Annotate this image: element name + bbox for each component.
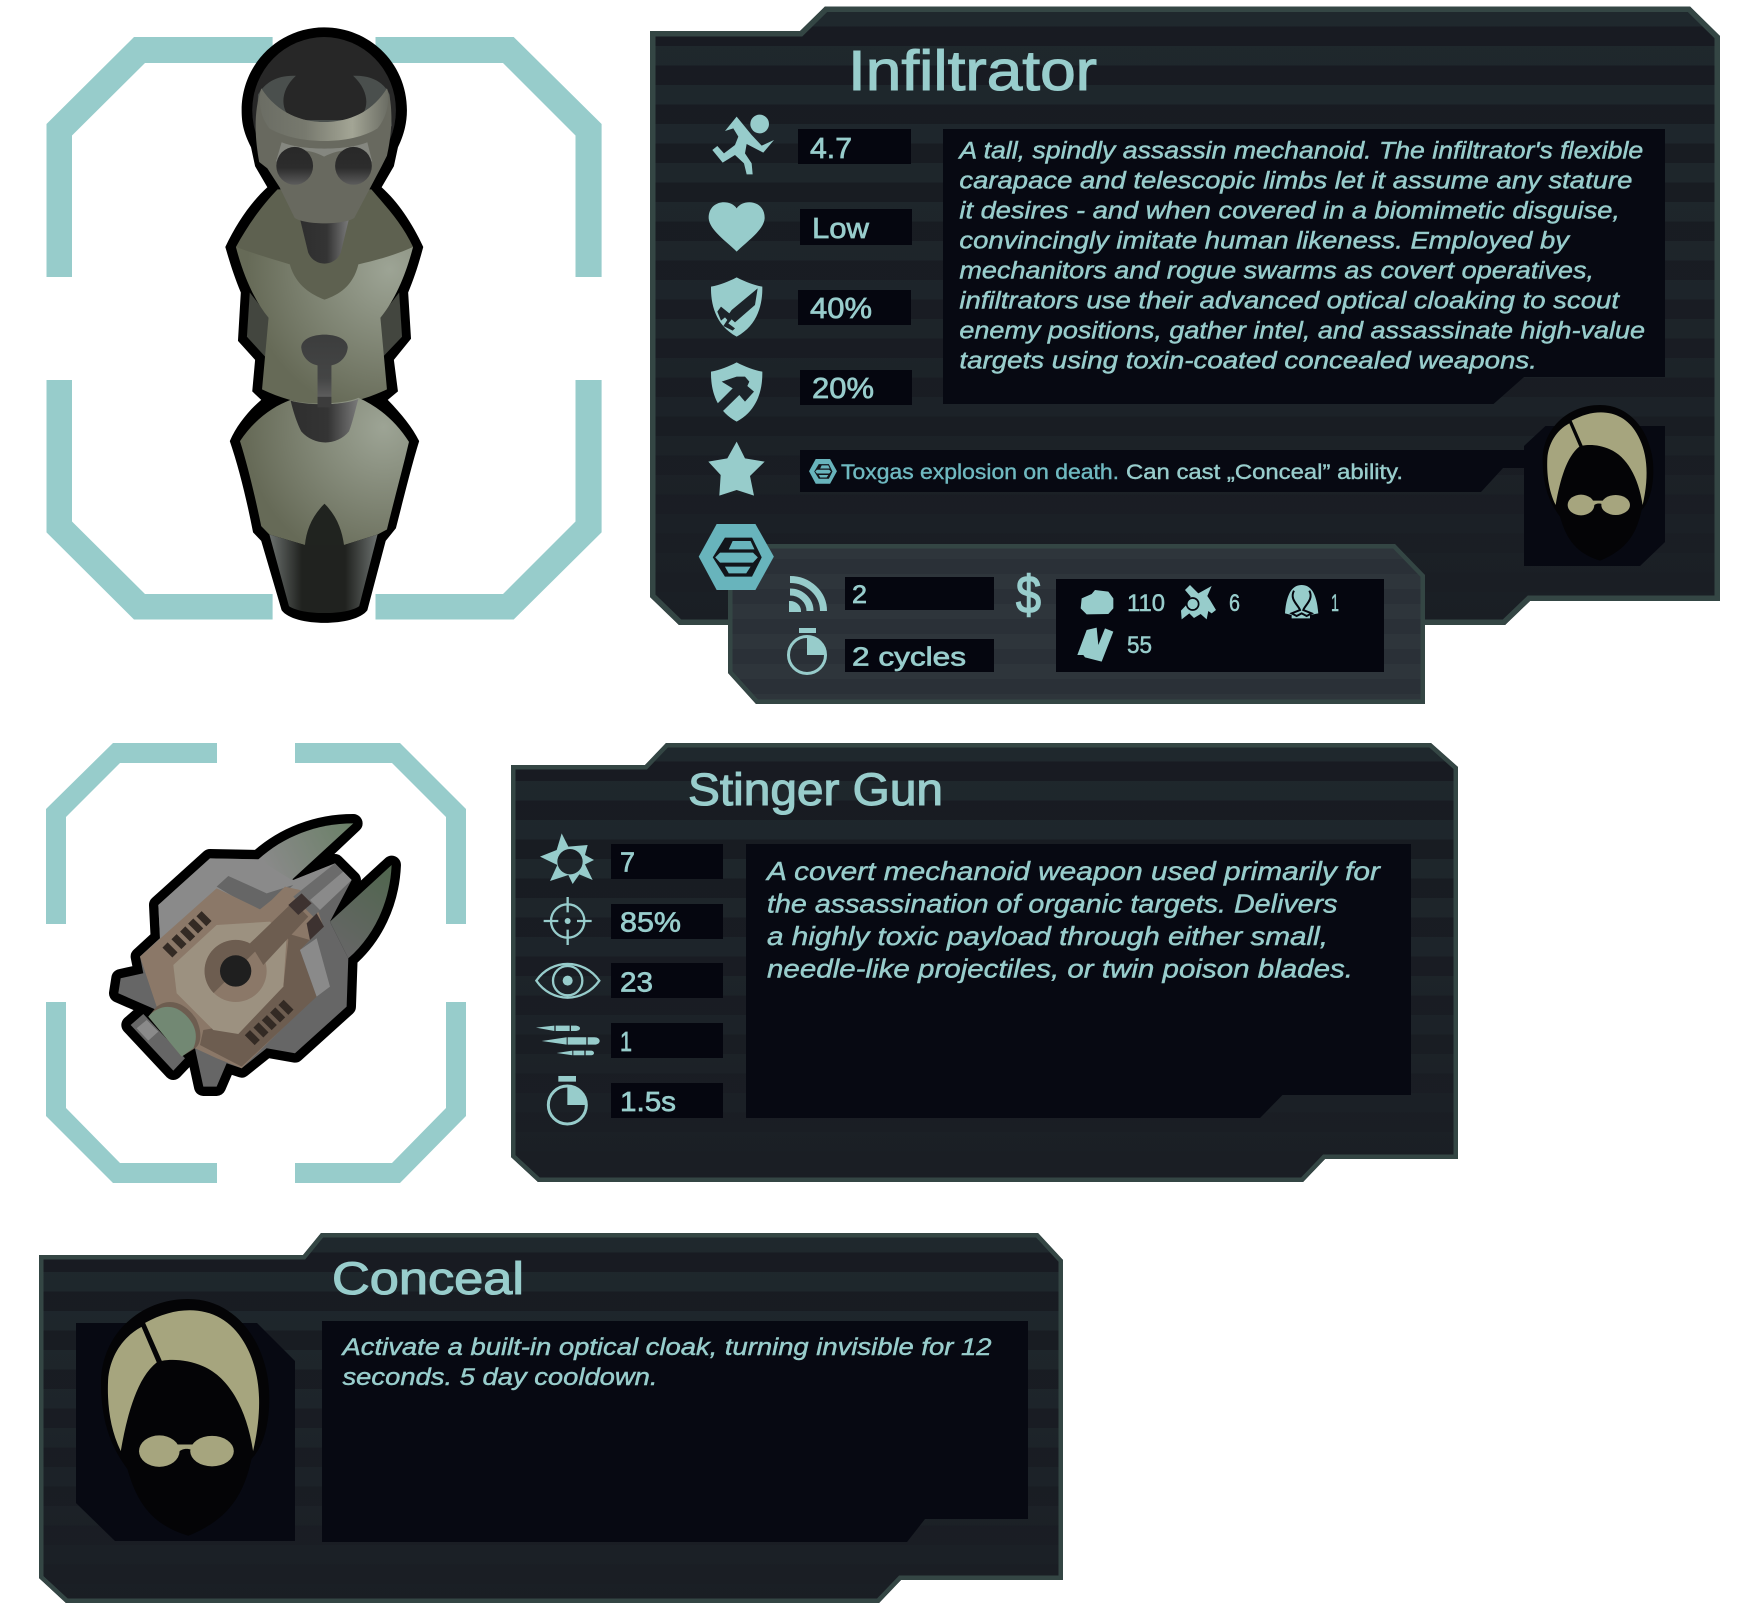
icon: cooldown timer: [548, 1076, 587, 1124]
infiltrator robot illustration: [225, 27, 423, 623]
weapon portrait frame: [46, 743, 466, 1183]
cost box: 1: [1331, 590, 1339, 617]
description box: A tall, spindly assassin mechanoid. The infiltrator's flexible: [957, 137, 1643, 164]
panel: conceal ability card: [39, 1233, 1063, 1603]
stat: 1: [611, 1023, 723, 1058]
icon: damage burst: [540, 833, 594, 884]
ability strip: [800, 450, 1530, 492]
stat: 23: [611, 963, 723, 998]
description box: enemy positions, gather intel, and assassinate high-value: [959, 317, 1645, 344]
icon: signal bandwidth: [790, 580, 824, 611]
cost box: 55: [1127, 632, 1152, 659]
stat: 23: 23: [620, 967, 653, 998]
panel: infiltrator stat card: [650, 6, 1720, 625]
stat: Low: [800, 209, 912, 245]
description box: Activate a built-in optical cloak, turning invisible for 12: [340, 1334, 992, 1361]
icon: star: [708, 442, 765, 496]
stat: 1.5s: [611, 1083, 723, 1118]
stat: bandwidth 2: 2: [852, 581, 867, 609]
description box: convincingly imitate human likeness. Employed by: [959, 227, 1571, 254]
description box: carapace and telescopic limbs let it assume any stature: [959, 167, 1632, 194]
stat: Low: Low: [812, 213, 870, 245]
description box: targets using toxin-coated concealed weapons.: [959, 347, 1537, 374]
robot portrait frame: [46, 37, 602, 620]
icon: hammer shield: [711, 362, 762, 422]
ability portrait: [76, 1299, 295, 1541]
stat: 7: [611, 844, 723, 879]
icon: move speed runner: [712, 115, 774, 174]
description box: needle-like projectiles, or twin poison blades.: [767, 954, 1353, 984]
icon: eye range: [536, 964, 599, 998]
stat: 1: 1: [620, 1026, 632, 1057]
icon: bullets burst: [536, 1026, 600, 1055]
heading: Stinger Gun: Stinger Gun: [688, 764, 943, 815]
icon: sword shield: [711, 277, 762, 337]
stat: 2 cycles: [845, 639, 994, 672]
description box: [746, 844, 1411, 1118]
icon: dollar cost: $: [1016, 566, 1041, 625]
description box: the assassination of organic targets. Delivers: [767, 888, 1338, 918]
ability strip: Can cast „Conceal” ability.: [1126, 461, 1403, 484]
stat: 20%: [800, 370, 912, 405]
stat: bandwidth 2: [845, 577, 994, 610]
stat: 85%: 85%: [620, 907, 681, 938]
icon: gestation timer: [788, 628, 826, 674]
stat: 4.7: 4.7: [810, 133, 852, 165]
stat: 40%: [798, 290, 911, 325]
heading: Conceal: Conceal: [332, 1253, 524, 1304]
cost box: 6: [1229, 590, 1240, 617]
ability portrait: [1524, 405, 1665, 566]
icon: heart: [709, 202, 765, 252]
description box: a highly toxic payload through either small,: [767, 921, 1328, 951]
description box: it desires - and when covered in a biomimetic disguise,: [959, 197, 1620, 224]
cost box: 110: [1127, 590, 1165, 617]
ability strip: Toxgas explosion on death.: [841, 461, 1119, 484]
description box: mechanitors and rogue swarms as covert operatives,: [959, 257, 1594, 284]
icon: hexagon badge: [699, 524, 774, 590]
panel: production sub-card: [699, 524, 1425, 704]
stinger gun illustration: [118, 823, 392, 1087]
stat: 1.5s: 1.5s: [620, 1086, 676, 1117]
stat: 40%: 40%: [810, 293, 872, 325]
description box: [322, 1321, 1028, 1542]
stat: 20%: 20%: [812, 373, 874, 405]
description box: [943, 129, 1665, 404]
panel: stinger gun card: [511, 743, 1458, 1182]
stat: 7: 7: [620, 847, 635, 878]
icon: crosshair accuracy: [544, 897, 592, 945]
stat: 2 cycles: 2 cycles: [852, 642, 966, 672]
cost box: [1056, 579, 1384, 672]
description box: seconds. 5 day cooldown.: [342, 1364, 658, 1391]
description box: A covert mechanoid weapon used primarily for: [765, 856, 1382, 886]
stat: 4.7: [798, 129, 911, 165]
heading: Infiltrator: Infiltrator: [848, 39, 1097, 103]
description box: infiltrators use their advanced optical cloaking to scout: [959, 287, 1621, 314]
stat: 85%: [611, 904, 723, 939]
